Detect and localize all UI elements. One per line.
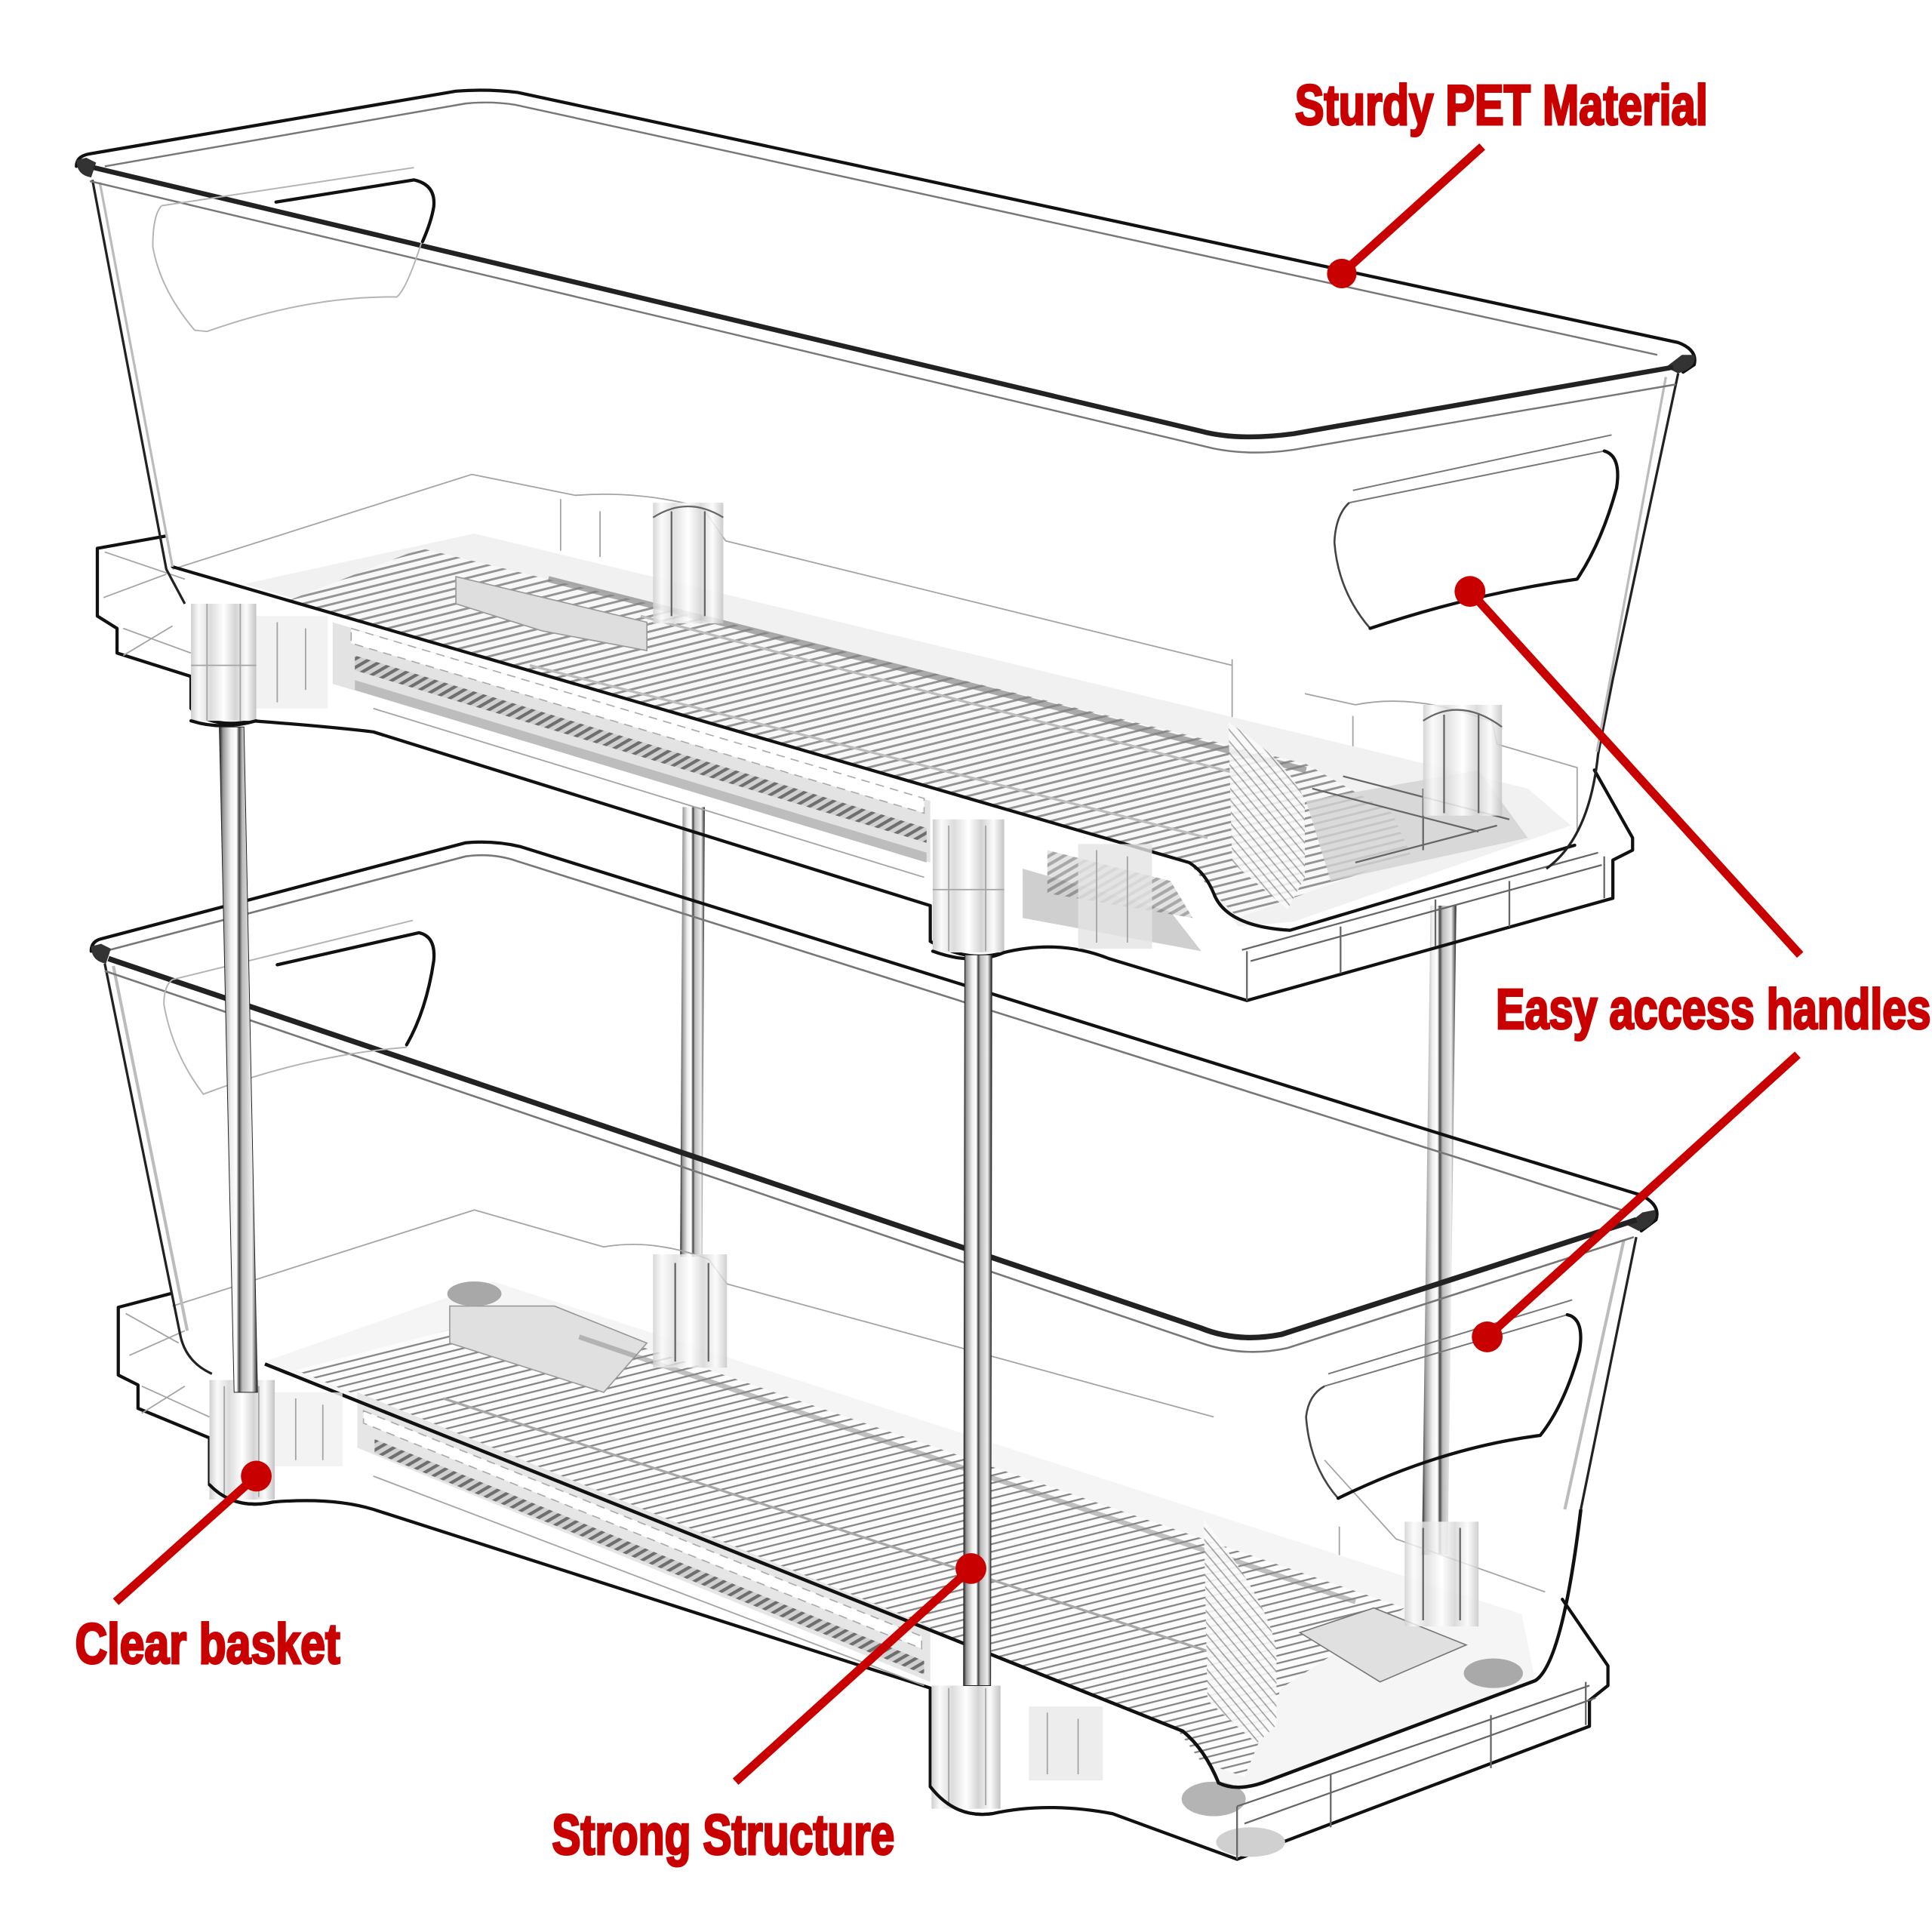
upper front posts xyxy=(191,604,1152,959)
lower rear posts xyxy=(653,1254,1478,1626)
lower tray back ledge xyxy=(173,1210,1545,1592)
lower tray outline xyxy=(118,1294,1608,1860)
lower basket left handle xyxy=(164,921,434,1094)
lower rim front band xyxy=(109,958,1636,1337)
upper rim corner blobs xyxy=(76,158,1695,374)
lower tray floor panel xyxy=(265,1281,1535,1786)
lower basket body edges xyxy=(105,964,1636,1509)
lower reflection curve xyxy=(1204,1519,1276,1743)
upper rear posts xyxy=(653,503,1502,816)
upper tray outline xyxy=(97,536,1632,1001)
lower tray side box xyxy=(126,1313,210,1417)
rods: front support rods xyxy=(220,727,992,1685)
upper basket right handle xyxy=(1334,435,1617,629)
lower basket right handle xyxy=(1306,1300,1581,1498)
callout: Strong Structure: Strong Structure xyxy=(552,1803,894,1866)
callout: Sturdy PET Material xyxy=(1295,73,1708,288)
lower basket xyxy=(91,842,1657,1509)
lower basket inner rim xyxy=(105,855,1634,1352)
upper basket left handle xyxy=(152,168,434,331)
upper reflection curve xyxy=(1229,722,1305,909)
lower rim dark lines xyxy=(91,842,1657,1231)
upper basket inner rim xyxy=(90,103,1675,453)
lower rim corner blobs xyxy=(91,944,1655,1231)
lower front edge xyxy=(265,1364,1581,1787)
upper tier: tray and slide rail xyxy=(97,475,1632,1001)
callout: Clear basket xyxy=(75,1461,340,1675)
upper grating cross bars xyxy=(456,577,1306,838)
lower grating cross bars xyxy=(444,1281,1355,1663)
lower tier: tray and slide rail xyxy=(118,1210,1608,1860)
upper end detail xyxy=(1242,770,1604,1001)
lower rail hatch xyxy=(357,1392,931,1685)
upper grating xyxy=(290,549,1411,918)
callout: Clear basket: Clear basket xyxy=(75,1612,340,1675)
callout: Easy access handles xyxy=(1454,576,1930,1352)
upper tray back ledge xyxy=(173,475,1577,833)
upper basket body edges xyxy=(92,180,1678,869)
callout: Strong Structure xyxy=(552,1553,986,1866)
upper tray floor panel xyxy=(244,534,1571,927)
upper rim front band xyxy=(94,168,1673,437)
lower front posts xyxy=(210,1380,1103,1814)
upper rail hatch xyxy=(333,622,1201,951)
upper tray side box xyxy=(103,552,191,656)
upper rim dark lines xyxy=(76,91,1695,372)
callout: Sturdy PET Material: Sturdy PET Material xyxy=(1295,73,1708,137)
upper basket xyxy=(76,91,1695,869)
lower end detail xyxy=(1182,1608,1595,1860)
lower grating xyxy=(296,1309,1404,1777)
upper front edge xyxy=(173,567,1575,931)
rods: rear support rods xyxy=(680,807,1457,1555)
